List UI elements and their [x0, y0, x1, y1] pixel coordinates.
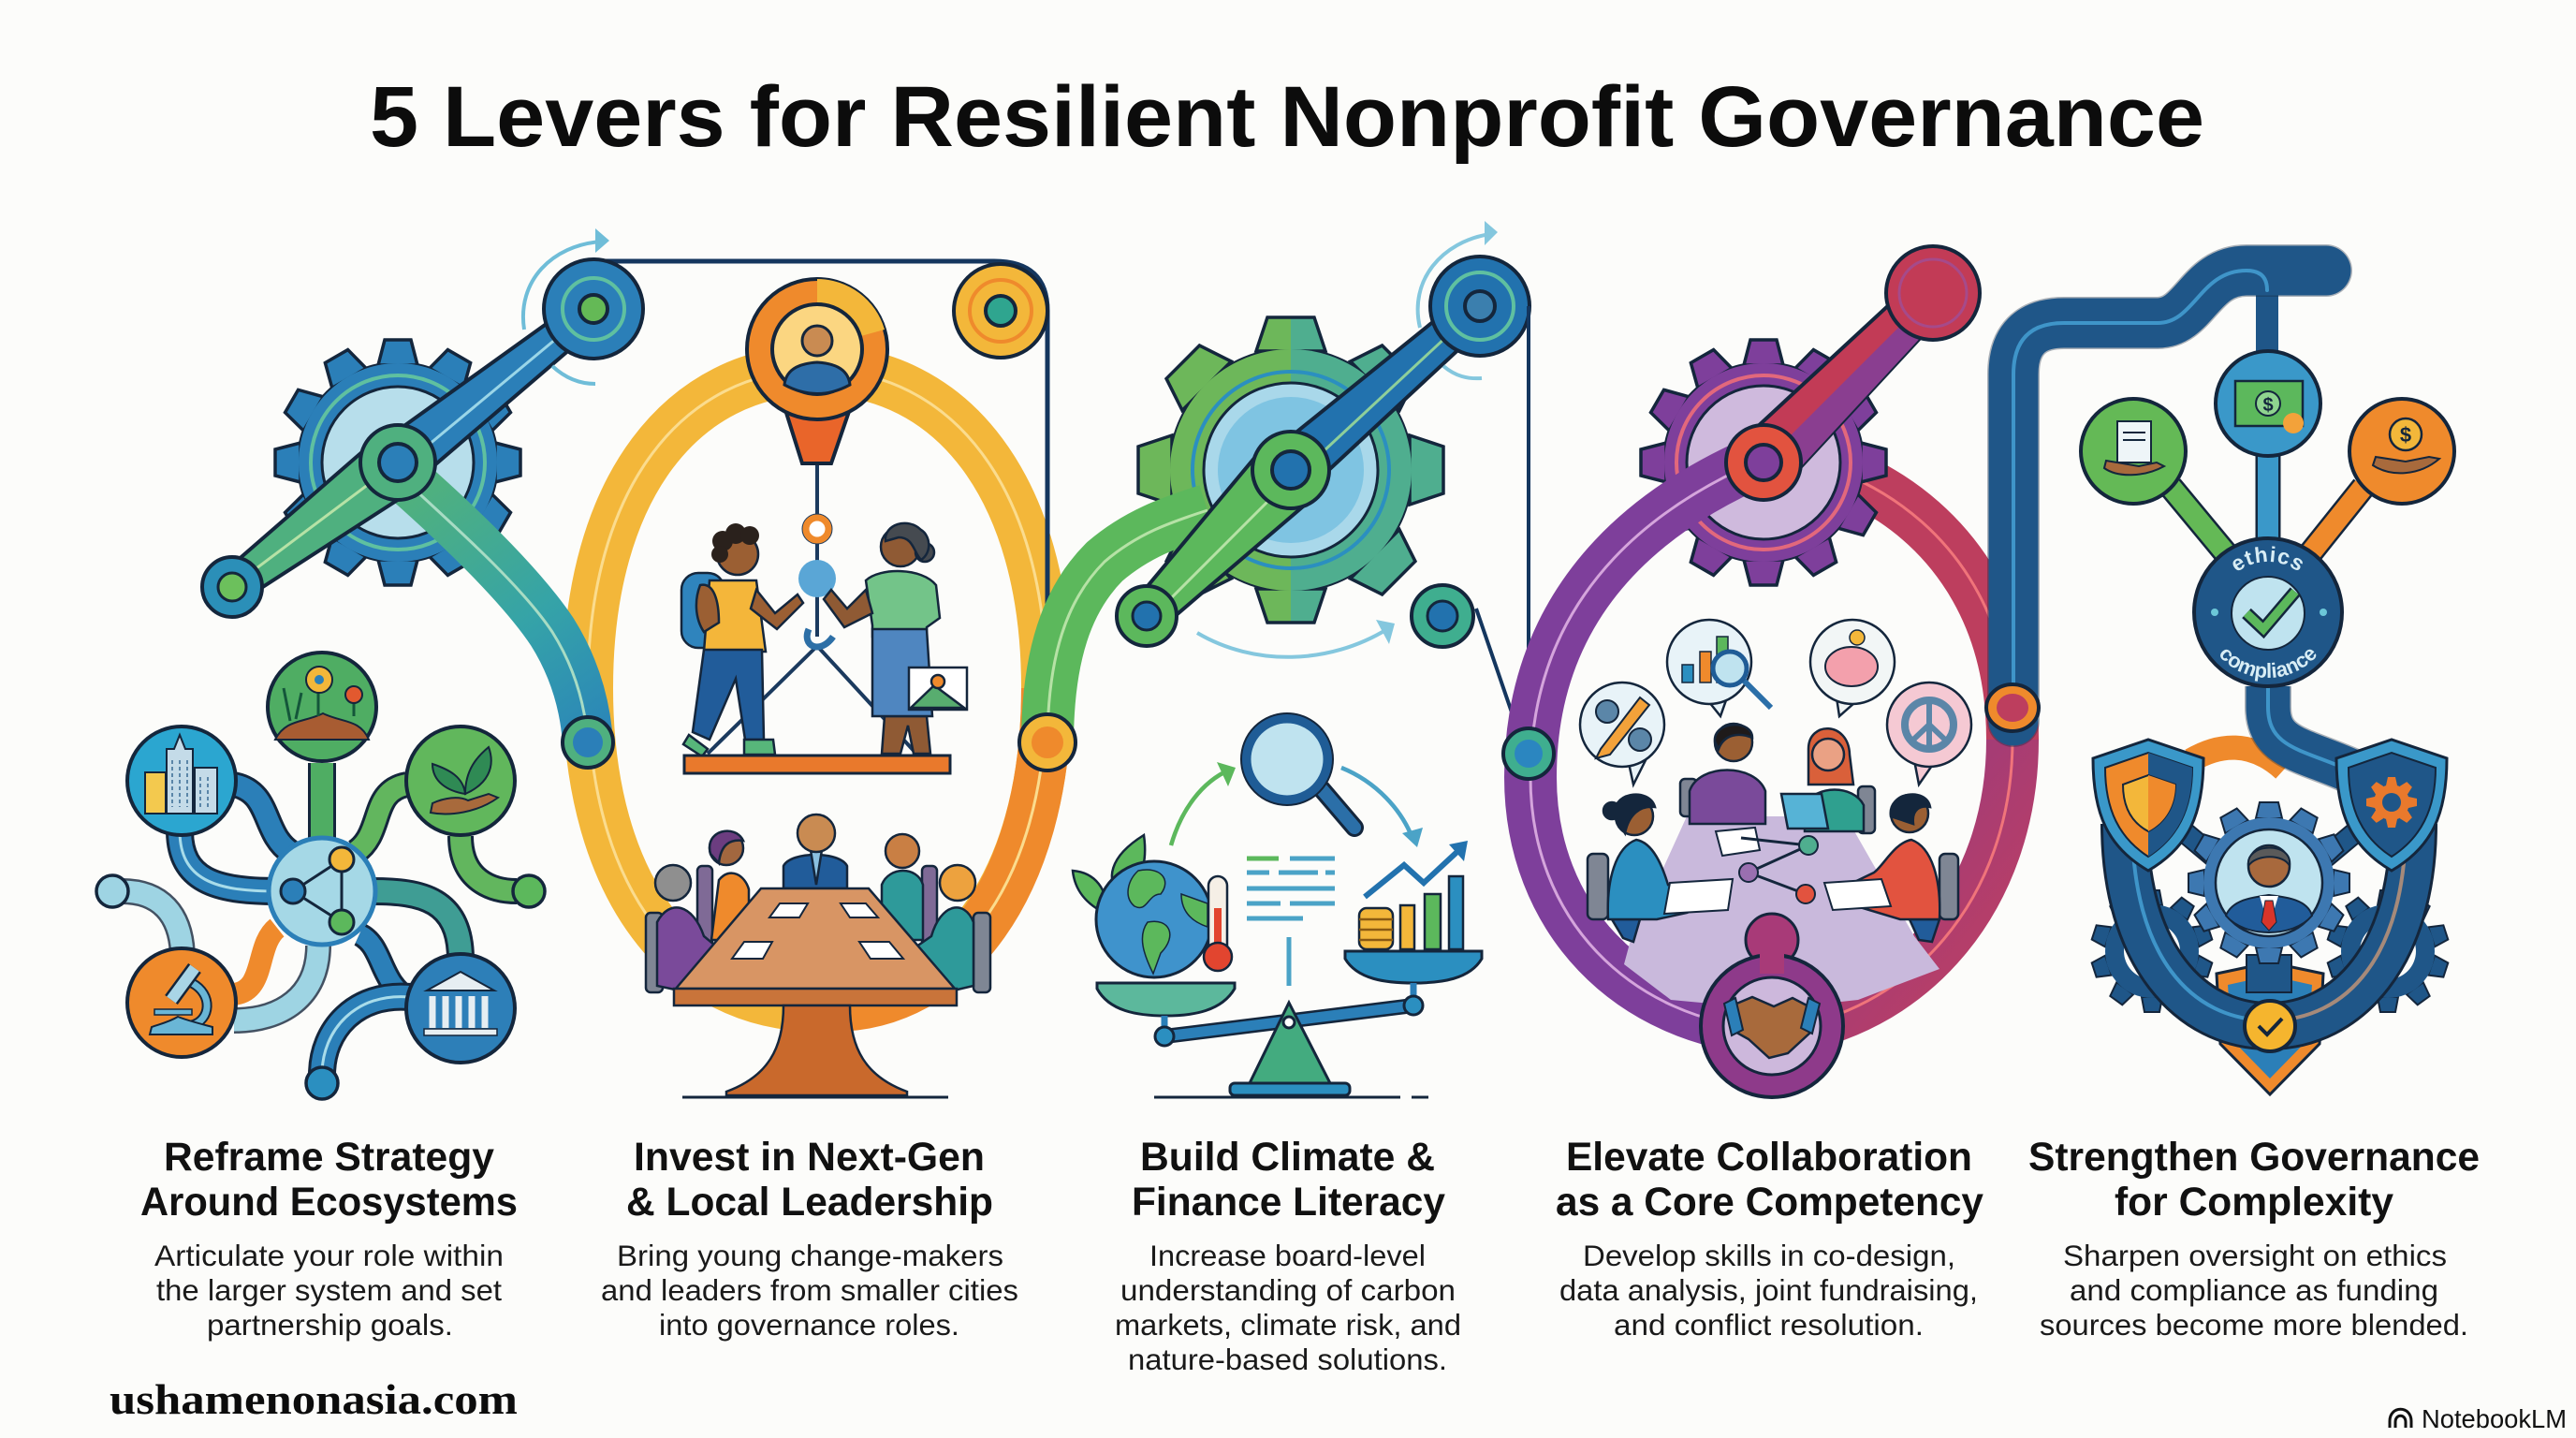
coloured stems	[2171, 456, 2364, 557]
icon: coin in hand circle	[2349, 399, 2454, 504]
arrows around magnifier	[1171, 762, 1423, 847]
crank arm	[1742, 278, 1948, 484]
globe thermometer	[1073, 835, 1232, 977]
purple side of loop	[1530, 459, 1772, 1030]
check seal	[2245, 1001, 2295, 1051]
platform	[684, 756, 950, 773]
joint	[360, 425, 435, 500]
green crank arm	[222, 437, 417, 600]
team around table	[1588, 724, 1958, 942]
heading and text 4: as a Core Competency	[1556, 1180, 1983, 1225]
bottom shield	[2217, 962, 2323, 1094]
network connectors	[122, 763, 517, 1075]
heading and text 5: for Complexity	[2115, 1180, 2393, 1225]
heading and text 5: sources become more blended.	[2040, 1308, 2468, 1342]
lower knob	[202, 557, 262, 617]
blue crank arm	[382, 297, 603, 483]
rotation arrows	[1197, 221, 1498, 657]
panel: lever 3 climate and finance literacy	[1019, 221, 1530, 1097]
website credit: ushamenonasia.com	[110, 1375, 518, 1423]
side gears	[2091, 890, 2449, 1012]
panel: lever 1 reframe strategy	[96, 228, 643, 1099]
boardroom table and people	[646, 814, 990, 1095]
crimson side of loop	[1772, 482, 2012, 1030]
ecosystem network	[96, 653, 545, 1099]
lavender table	[1624, 816, 1939, 1009]
left shield	[2093, 740, 2203, 871]
joint	[1726, 425, 1801, 500]
icon bubble: data analysis	[1667, 620, 1771, 716]
icon bubble: fundraising	[1810, 620, 1895, 716]
heading and text 1: partnership goals.	[207, 1308, 453, 1342]
NotebookLM mark: NotebookLM	[2422, 1404, 2567, 1433]
right shield	[2336, 740, 2447, 871]
heading and text 1: Reframe Strategy	[164, 1135, 494, 1180]
heading and text 5	[2028, 1135, 2480, 1342]
panel: lever 2 next-gen leadership	[588, 261, 1047, 1097]
pipe from badge	[2268, 686, 2354, 772]
funding stems	[2171, 456, 2364, 557]
heading and text 3: markets, climate risk, and	[1115, 1308, 1461, 1342]
pulley yellow	[954, 264, 1047, 358]
heading and text 3: nature-based solutions.	[1128, 1343, 1447, 1376]
red knob	[1886, 246, 1980, 340]
ethics compliance badge: ethics	[2233, 546, 2303, 571]
heading and text 3: understanding of carbon	[1120, 1273, 1456, 1307]
heading and text 2: Bring young change-makers	[617, 1239, 1003, 1272]
joint	[1252, 432, 1329, 508]
icon bubble: skills	[1580, 682, 1664, 785]
rotation arrows	[523, 228, 609, 384]
heading and text 3	[1115, 1135, 1461, 1376]
heading and text 4: and conflict resolution.	[1614, 1308, 1924, 1342]
icon: grant document circle	[2081, 399, 2186, 504]
green belt	[1047, 510, 1208, 744]
title: 5 Levers for Resilient Nonprofit Governance	[370, 69, 2204, 165]
handshake badge	[1701, 914, 1843, 1097]
belt node	[563, 717, 613, 768]
top knob	[1430, 257, 1530, 356]
heading and text 1	[140, 1135, 518, 1342]
ethics compliance badge: compliance	[2220, 650, 2316, 682]
icon: flowers in soil	[268, 653, 376, 761]
heading and text 2: and leaders from smaller cities	[601, 1273, 1018, 1307]
belt node orange	[1019, 714, 1076, 770]
icon: city	[127, 726, 236, 835]
purple gear	[1641, 340, 1886, 585]
icon bubble: conflict resolution	[1887, 682, 1971, 785]
cables	[1476, 306, 1529, 740]
heading and text 5: and compliance as funding	[2070, 1273, 2438, 1307]
green teal gear	[1138, 317, 1443, 623]
green blue belt	[404, 477, 588, 742]
crimson node	[1986, 684, 2039, 731]
icon: microscope	[127, 948, 236, 1057]
text lines icon	[1247, 858, 1335, 986]
icon: coin in hand circle: $	[2400, 423, 2411, 447]
navy ring	[2125, 824, 2413, 1026]
magnifying glass	[1241, 713, 1354, 828]
top knob	[544, 259, 643, 359]
centre gear with leader	[2188, 802, 2349, 963]
heading and text 4: Develop skills in co-design,	[1583, 1239, 1955, 1272]
panel: lever 5 governance	[1984, 244, 2456, 1097]
idler pulley	[1412, 585, 1473, 647]
heading and text 5: Sharpen oversight on ethics	[2063, 1239, 2447, 1272]
heading and text 1: Articulate your role within	[154, 1239, 504, 1272]
heading and text 3: Build Climate &	[1140, 1135, 1435, 1180]
heading and text 4: data analysis, joint fundraising,	[1559, 1273, 1978, 1307]
green crank arm	[1134, 445, 1316, 629]
heading and text 2: into governance roles.	[659, 1308, 959, 1342]
heading and text 2	[601, 1135, 1018, 1342]
orange arc behind shields	[2191, 748, 2284, 770]
heading and text 3: Finance Literacy	[1132, 1180, 1445, 1225]
heading and text 4: Elevate Collaboration	[1566, 1135, 1972, 1180]
blue gear	[275, 340, 520, 585]
mentor with briefcase	[824, 523, 967, 754]
end nodes	[96, 875, 545, 1099]
heading and text 3: Increase board-level	[1149, 1239, 1426, 1272]
node teal	[1503, 728, 1554, 779]
heading and text 4	[1556, 1135, 1983, 1342]
icon: banknote circle: $	[2262, 395, 2274, 416]
person pulley badge	[747, 279, 887, 463]
heading and text 2: & Local Leadership	[626, 1180, 993, 1225]
young person with backpack	[681, 523, 803, 756]
network hub	[269, 838, 375, 945]
coins and bar chart	[1359, 841, 1468, 949]
hoist line and hook	[708, 463, 916, 754]
icon: institution	[406, 954, 515, 1063]
ethics compliance badge	[2192, 536, 2344, 688]
network on table	[1739, 836, 1818, 903]
blue globe handshake	[798, 560, 836, 597]
navy pipe	[2013, 271, 2326, 721]
icon: banknote circle	[2216, 351, 2320, 456]
panel: lever 4 collaboration	[1503, 246, 2012, 1097]
heading and text 5: Strengthen Governance	[2028, 1135, 2480, 1180]
heading and text 2: Invest in Next-Gen	[634, 1135, 985, 1180]
thin cable over pulleys	[593, 261, 1047, 646]
lower left knob	[1117, 586, 1177, 646]
balance scale	[1097, 951, 1482, 1095]
stem and connectors	[2181, 824, 2359, 992]
icon: hand with plant	[406, 726, 515, 835]
heading and text 1: Around Ecosystems	[140, 1180, 518, 1225]
heading and text 1: the larger system and set	[156, 1273, 502, 1307]
yellow orange oval belt	[588, 370, 1046, 1006]
blue crank arm	[1274, 293, 1491, 490]
